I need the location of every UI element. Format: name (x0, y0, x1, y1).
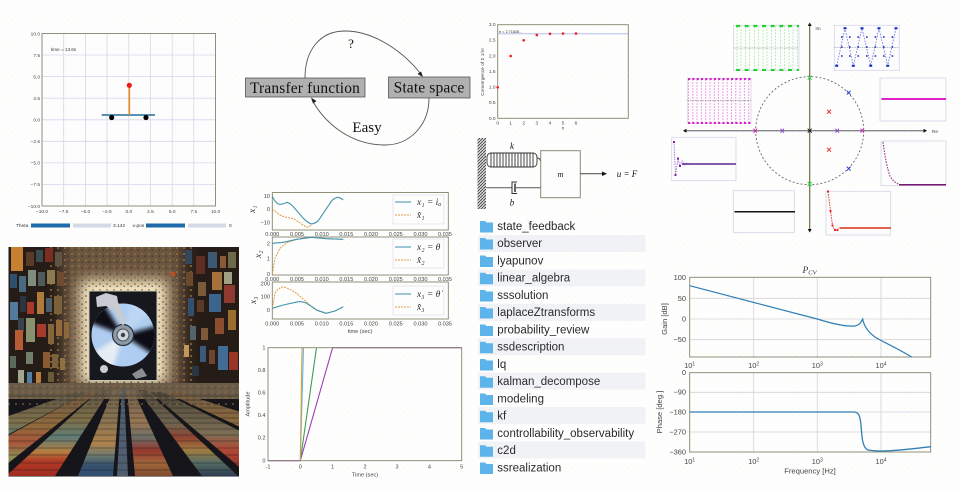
subplot x2: 0.015 (339, 277, 353, 283)
subplot x1: −10 (260, 220, 270, 226)
gain chart: 10 (812, 361, 820, 370)
real axis: Re (932, 129, 938, 135)
phase chart: −360 (669, 448, 686, 456)
transfer function box: Transfer function (250, 80, 360, 97)
subplot x1: 0.035 (438, 232, 452, 238)
glow behind disk (80, 280, 167, 384)
x axis ticks: 7.5 (190, 209, 197, 215)
subplot x3: 0.010 (315, 322, 329, 328)
panel: ramp response chart: 0 (262, 458, 266, 464)
panel: ramp response chart: 0 (299, 464, 302, 470)
panel: convergence to e chart: 2.0 (489, 53, 496, 59)
x axis ticks: 2.5 (147, 209, 154, 215)
imaginary axis (808, 22, 821, 232)
subplot x3: time (sec) (348, 329, 372, 335)
subplot x2: 0 (267, 272, 270, 278)
gain curve (690, 286, 912, 357)
subplot x1: 0.015 (339, 232, 353, 238)
panel: ramp response chart: 4 (428, 464, 431, 470)
inset: damped purple response (672, 137, 736, 181)
legend x1: x̂₁ (416, 210, 425, 221)
subplot x3: 0.025 (389, 322, 403, 328)
y axis ticks: 10.0 (31, 32, 40, 38)
gain chart: 3 (820, 362, 823, 368)
inset: constant magenta line (880, 78, 946, 121)
subplot x3: 0.015 (339, 322, 353, 328)
panel: convergence to e chart: 1.0 (489, 84, 496, 90)
gain chart: 10 (748, 361, 756, 370)
phase chart: Phase [deg.] (655, 391, 664, 433)
rows of drives converging (8, 388, 239, 476)
y axis ticks: −2.5 (31, 139, 40, 145)
panel: mass spring damper diagram: u = F (617, 169, 638, 179)
gain chart: 100 (674, 273, 686, 282)
phase chart: 10 (812, 457, 820, 466)
subplot x3: 0.005 (290, 322, 304, 328)
damper (486, 182, 541, 194)
icon: hard disk drive (88, 291, 160, 380)
panel: transfer function and state space diagram (246, 31, 470, 145)
panel: mass spring damper diagram (478, 138, 638, 209)
y axis ticks: 7.5 (33, 53, 40, 59)
mass block: m (558, 170, 564, 179)
panel: ramp response chart: 5 (460, 464, 463, 470)
panel: convergence to e chart: n (562, 126, 565, 132)
left wall of drives (10, 247, 69, 384)
panel: convergence to e chart: 1.5 (489, 69, 496, 75)
question mark label: ? (348, 36, 354, 51)
folder names: kf (497, 411, 507, 423)
folder names (497, 221, 634, 474)
unit circle (756, 77, 864, 185)
panel: ramp response chart: Time (sec) (352, 472, 378, 478)
labels: k (510, 141, 515, 151)
panel: ramp response chart: Amplitude (246, 392, 252, 416)
pole markers (754, 76, 864, 186)
legend x1 (393, 195, 444, 224)
folder names: lyapunov (497, 256, 544, 268)
gain chart: 10 (875, 361, 884, 370)
panel: convergence to e chart: 2 (522, 120, 525, 126)
gain chart: 1 (692, 362, 695, 368)
subplot x1: 0.000 (265, 232, 279, 238)
panel: ramp response chart: -1 (266, 464, 270, 470)
phase chart: −270 (669, 428, 686, 436)
arrow: transfer function to state space (305, 31, 423, 78)
panel: convergence to e chart: 0.0 (489, 116, 496, 122)
panel: convergence to e chart: 1 (509, 120, 512, 126)
inset: blue oscillation (834, 25, 899, 70)
panel: convergence to e chart: 2.5 (489, 38, 496, 44)
phase chart: 1 (692, 458, 695, 464)
theta slider (16, 223, 125, 229)
inset: purple decay (881, 141, 946, 186)
phase curve (690, 412, 931, 451)
panel: pole locations and time responses (672, 22, 946, 235)
phase chart: −90 (673, 388, 686, 397)
panel: observer state estimate plots (248, 192, 452, 335)
y axis ticks: 5.0 (33, 74, 40, 80)
subplot x2: 0.010 (315, 277, 329, 283)
cart wheels (109, 115, 149, 120)
subplot x2: 0.000 (265, 277, 279, 283)
legend x3: x₃ = θ̇ (416, 290, 443, 300)
subplot x2: 2 (267, 242, 270, 248)
panel: convergence to e chart: 0.5 (489, 100, 496, 106)
subplot x1: 0.005 (290, 232, 304, 238)
x axis ticks: −2.5 (102, 209, 112, 215)
y axis ticks: 2.5 (33, 96, 40, 102)
right wall of drives (171, 250, 238, 376)
folder names: ssdescription (497, 342, 564, 354)
x axis ticks: 10.0 (211, 209, 220, 215)
state space box: State space (394, 80, 464, 96)
subplot x1: x₁ (248, 205, 258, 214)
subplot x3: x₃ (249, 296, 259, 305)
folder names: sssolution (497, 290, 548, 302)
legend x3: x̂₃ (416, 302, 425, 313)
folder names: observer (497, 238, 542, 250)
real axis (683, 129, 938, 135)
floor (8, 399, 239, 476)
theta slider: Theta (16, 223, 29, 229)
phase chart: 10 (684, 457, 692, 466)
panel: convergence to e chart: Convergence of Σ 1/n! (480, 48, 486, 96)
phase chart: 4 (884, 458, 887, 464)
panel: convergence to e chart: 3.0 (489, 22, 496, 28)
inset: magenta oscillation (687, 78, 751, 123)
panel: ramp response chart: 1 (262, 346, 266, 352)
panel: ramp response chart: 2 (363, 464, 367, 470)
y axis ticks: 0.0 (33, 118, 40, 124)
panel: convergence to e chart: 0 (496, 120, 499, 126)
folder names: lq (497, 359, 506, 371)
subplot x3: 0.000 (265, 322, 279, 328)
inset: black constant (733, 191, 795, 233)
panel: mass spring damper diagram: b (510, 198, 515, 208)
x axis ticks: −5.0 (81, 209, 90, 215)
subplot x1: 10 (264, 194, 270, 200)
panel: convergence to e chart: 5 (562, 120, 565, 126)
subplot x2: 0.030 (414, 277, 428, 283)
shelf lines across rows (0, 396, 240, 470)
gain chart: 2 (756, 362, 759, 368)
panel: convergence to e chart: e = 2.71828... (499, 30, 522, 34)
phase chart: 2 (756, 458, 759, 464)
subplot x2: x₂ (254, 250, 264, 259)
folder names: linear_algebra (497, 273, 571, 285)
y axis ticks (28, 32, 40, 210)
subplot x3: 0.020 (364, 322, 378, 328)
legend x2 (393, 239, 444, 268)
panel: illustration of hard disk and storage rows (8, 247, 239, 476)
panel: convergence to e chart: 3 (535, 120, 538, 126)
subplot x3: 0 (267, 308, 270, 314)
subplot x2: 0.020 (364, 277, 378, 283)
panel: ramp response chart: 0.8 (258, 368, 266, 374)
legend x3 (393, 286, 444, 315)
subplot x2: 0.005 (290, 277, 304, 283)
x position slider: 0 (229, 223, 232, 229)
gain chart: 10 (684, 361, 692, 370)
phase chart: 10 (748, 457, 756, 466)
panel: ramp response chart: 0.2 (258, 436, 266, 442)
x axis ticks: 0.0 (125, 209, 132, 215)
subplot x1: 0.025 (389, 232, 403, 238)
subplot x1: 0.010 (315, 232, 329, 238)
phase chart: 3 (820, 458, 823, 464)
gain chart: 4 (884, 362, 887, 368)
folder icons (480, 221, 493, 474)
subplot x3: 0.030 (414, 322, 428, 328)
legend x2: x̂₂ (416, 255, 425, 266)
panel: convergence to e chart: 6 (575, 120, 578, 126)
phase chart (655, 368, 931, 476)
speckled backdrop (62, 235, 184, 395)
x axis ticks: −7.5 (59, 209, 69, 215)
panel: cart-pole simulation (16, 32, 232, 229)
subplot x3: 200 (261, 282, 270, 288)
panel: convergence to e chart (480, 22, 628, 132)
x position slider: x-pos (132, 224, 145, 229)
imaginary axis: Im (815, 26, 821, 32)
pendulum rod (128, 86, 130, 115)
panel: ramp response chart: 3 (395, 464, 399, 470)
y axis ticks: −10.0 (28, 204, 40, 210)
easy label: Easy (352, 120, 382, 136)
y axis ticks: −5.0 (31, 160, 40, 166)
panel: ramp response chart (246, 346, 463, 478)
folder names: modeling (497, 394, 544, 406)
panel: ramp response chart: 0.4 (258, 413, 266, 419)
gain chart: Gain [dB] (660, 303, 669, 335)
x position slider (132, 223, 232, 229)
panel: ramp response chart: 0.6 (258, 390, 266, 396)
legend x2: x₂ = θ (416, 243, 441, 253)
mass block (541, 151, 580, 198)
folder names: probability_review (497, 324, 590, 336)
folder names: kalman_decompose (497, 376, 600, 388)
subplot x2 (254, 237, 452, 283)
subplot x1: 0.030 (414, 232, 428, 238)
ramp lines (268, 348, 462, 461)
folder names: controllability_observability (497, 428, 634, 440)
subplot x1 (248, 192, 452, 238)
x axis ticks: −10.0 (36, 209, 48, 215)
folder names: laplaceZtransforms (497, 307, 595, 319)
panel: ramp response chart: 1 (331, 464, 334, 470)
inset: green oscillation (734, 25, 799, 70)
folder names: state_feedback (497, 221, 576, 233)
subplot x2: 0.025 (389, 277, 403, 283)
legend x1: x₁ = iₐ (416, 198, 441, 208)
spring (487, 153, 540, 167)
floor speckle (8, 382, 240, 406)
plot title: P (802, 266, 808, 276)
gain chart: 0 (682, 314, 686, 324)
theta slider: 3.142 (113, 223, 125, 229)
phase chart: 10 (875, 457, 884, 466)
cart platform (102, 114, 155, 116)
data points (496, 32, 577, 89)
subplot x2: 0.035 (438, 277, 452, 283)
plot title: CV (808, 270, 818, 276)
folder names: ssrealization (497, 462, 561, 474)
panel: bode plot (655, 266, 931, 476)
subplot x2: 1 (267, 256, 270, 262)
folder names: c2d (497, 445, 516, 457)
subplot x1: 0.020 (364, 232, 378, 238)
phase chart: Frequency [Hz] (784, 466, 836, 476)
force arrow (580, 172, 607, 176)
phase chart: −180 (669, 408, 686, 416)
subplot x3: 0.035 (438, 322, 452, 328)
x axis ticks (36, 209, 220, 215)
pendulum bob (127, 83, 132, 88)
y axis ticks: −7.5 (31, 182, 40, 188)
subplot x1: 0 (267, 207, 270, 213)
subplot x3: 100 (261, 295, 270, 301)
gain chart (660, 273, 931, 370)
gain chart: −50 (673, 335, 686, 344)
panel: folder list (478, 221, 646, 474)
panel: convergence to e chart: 4 (549, 120, 552, 126)
inset: red decay (826, 190, 891, 235)
x axis ticks: 5.0 (169, 209, 176, 215)
wall (478, 138, 486, 209)
phase chart: 0 (682, 368, 686, 377)
arrow: state space to transfer function (311, 98, 429, 145)
gain chart: 50 (678, 294, 686, 303)
time label: time = 13.6s (51, 47, 77, 52)
subplot x3 (249, 282, 452, 335)
row stripes (478, 235, 646, 458)
